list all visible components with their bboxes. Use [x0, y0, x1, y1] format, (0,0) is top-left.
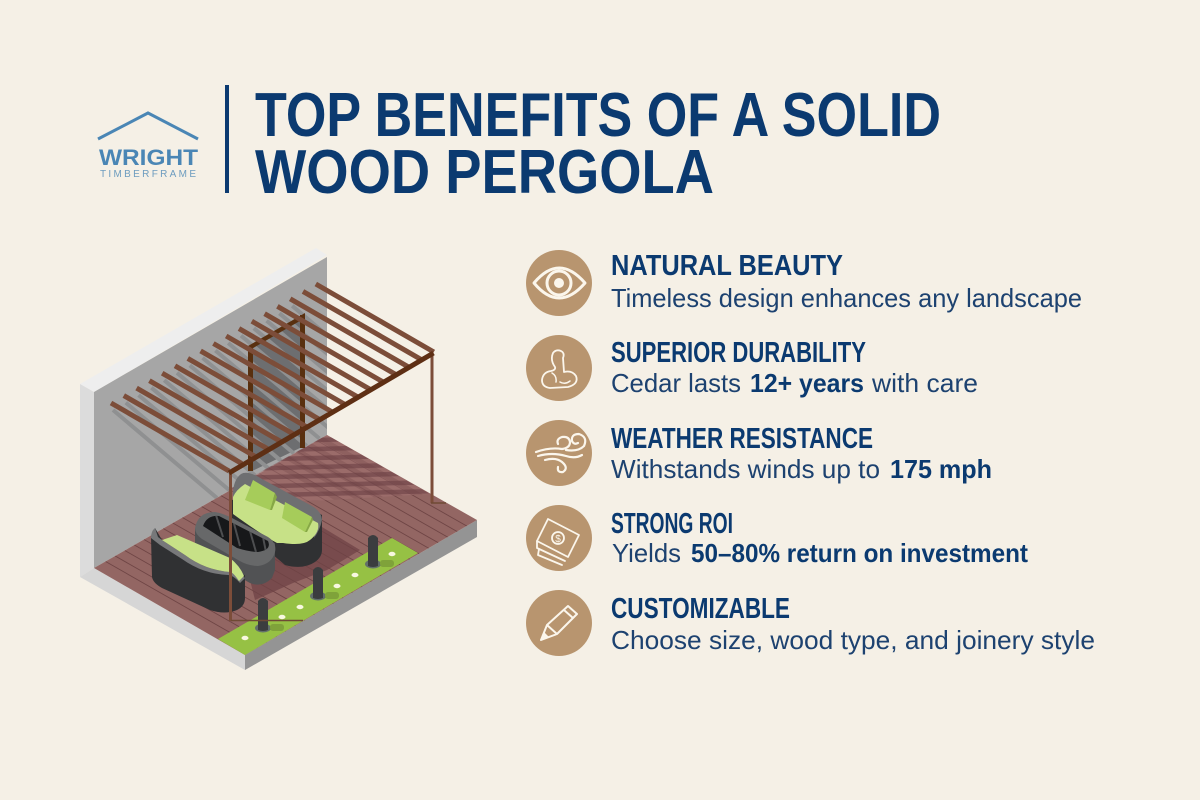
coffee table	[195, 512, 275, 585]
front beam	[229, 353, 434, 473]
heading and text: Choose size, wood type, and joinery style	[611, 625, 1095, 655]
bollards	[255, 535, 394, 632]
title: TOP BENEFITS OF A SOLID	[255, 81, 941, 150]
heading and text: with care	[871, 368, 978, 398]
back sofa	[232, 473, 322, 567]
deck floor	[94, 435, 477, 655]
heading and text: CUSTOMIZABLE	[611, 593, 790, 625]
title	[255, 81, 941, 207]
icon: pencil	[526, 590, 592, 656]
heading and text: NATURAL BEAUTY	[611, 250, 843, 282]
heading and text: STRONG ROI	[611, 508, 733, 540]
furniture shadow on floor	[245, 527, 360, 600]
heading and text: 50–80% return on investment	[691, 538, 1028, 568]
front sofa	[151, 528, 245, 612]
sofa pillows	[245, 480, 275, 510]
icon: eye	[526, 250, 592, 316]
heading and text	[611, 508, 1028, 568]
benefit: strong ROI	[526, 505, 1028, 571]
logo tagline: TIMBERFRAME	[100, 169, 196, 180]
illustration: isometric pergola patio	[80, 248, 487, 670]
pergola shadow on floor	[228, 435, 429, 501]
logo wordmark: WRIGHT	[99, 145, 199, 170]
benefit: customizable	[526, 590, 1095, 656]
garden lights	[242, 552, 396, 640]
benefit: superior durability	[526, 335, 978, 401]
wall	[80, 257, 327, 577]
heading and text: Yields	[612, 538, 681, 568]
heading and text	[611, 337, 978, 398]
icon: wind	[526, 420, 592, 486]
title divider	[225, 85, 229, 193]
heading and text	[611, 250, 1082, 313]
heading and text: Withstands winds up to	[611, 454, 880, 484]
icon: money bills	[526, 505, 592, 571]
benefit: natural beauty	[526, 250, 1082, 316]
roof slats	[111, 284, 434, 471]
floor base edges	[80, 520, 477, 670]
logo: Wright Timberframe	[98, 113, 199, 180]
icon: flexed arm	[526, 335, 592, 401]
logo roof icon	[98, 113, 198, 139]
front posts	[229, 473, 232, 621]
heading and text: SUPERIOR DURABILITY	[611, 337, 866, 369]
heading and text: Cedar lasts	[611, 368, 741, 398]
heading and text: 175 mph	[890, 454, 992, 484]
heading and text: WEATHER RESISTANCE	[611, 423, 873, 455]
heading and text: 12+ years	[750, 368, 864, 398]
grass strip	[218, 538, 418, 655]
heading and text	[611, 423, 992, 484]
back posts and beam	[248, 313, 305, 471]
heading and text: Timeless design enhances any landscape	[611, 283, 1082, 313]
heading and text	[611, 593, 1095, 655]
pergola frame	[111, 284, 446, 621]
title: WOOD PERGOLA	[255, 138, 714, 207]
icon: money bills: $	[555, 534, 561, 545]
benefit: weather resistance	[526, 420, 992, 486]
